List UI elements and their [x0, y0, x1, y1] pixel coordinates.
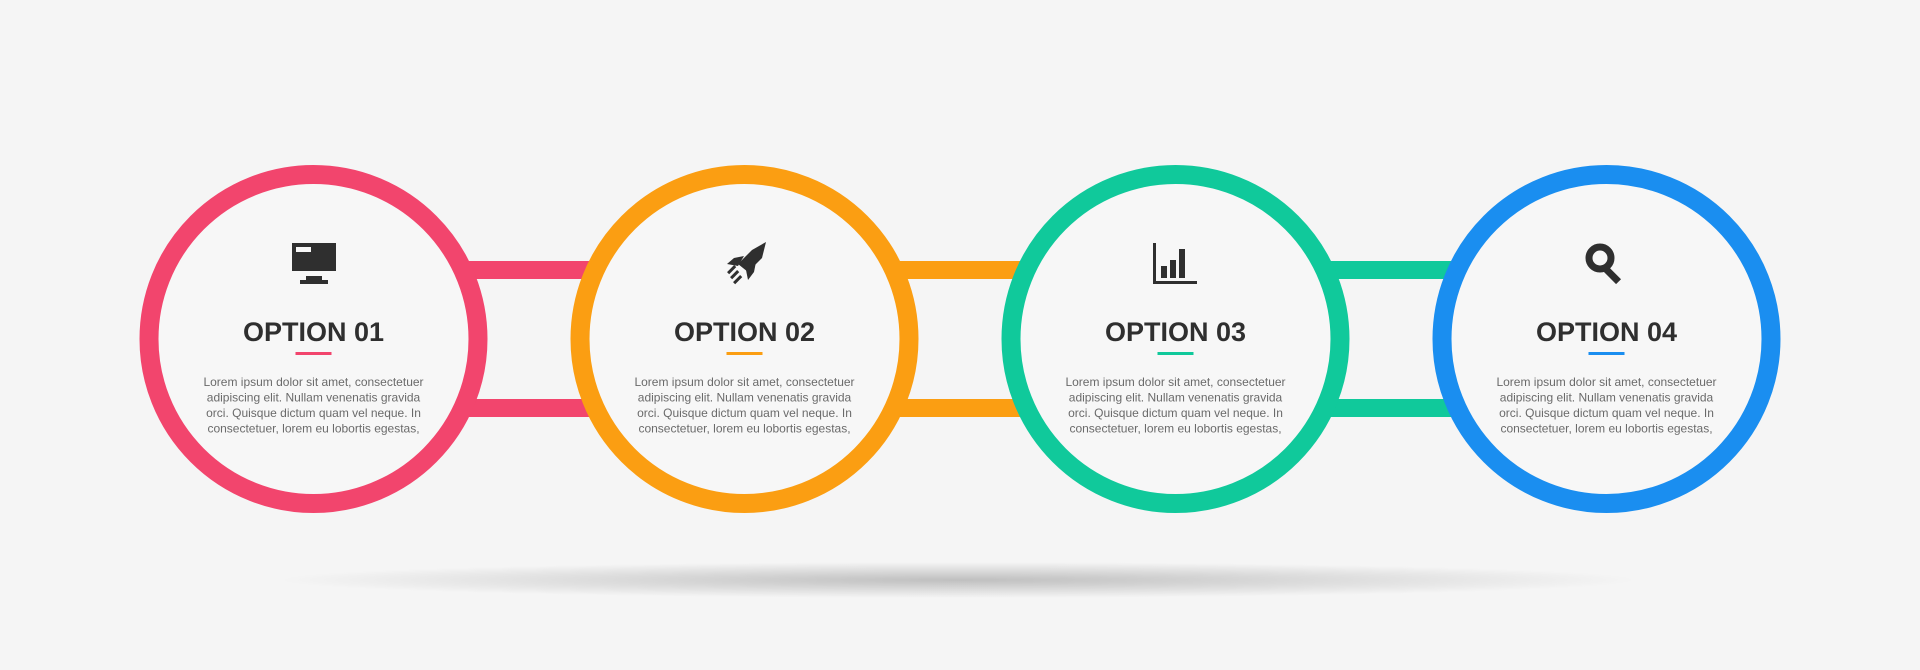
icon: bar chart	[1153, 243, 1197, 284]
text block: orci. Quisque dictum quam vel neque. In	[1068, 406, 1283, 420]
panel: option 01	[149, 174, 478, 504]
heading: OPTION 04	[1536, 317, 1677, 347]
connector 3	[1300, 261, 1480, 417]
text block: Lorem ipsum dolor sit amet, consectetuer	[634, 375, 855, 389]
text block: Lorem ipsum dolor sit amet, consectetuer	[1496, 375, 1717, 389]
heading: OPTION 02	[674, 317, 815, 347]
text block: adipiscing elit. Nullam venenatis gravida	[1069, 390, 1283, 404]
connector 2	[870, 261, 1050, 417]
panel: option 03	[1011, 174, 1340, 504]
heading: OPTION 03	[1105, 317, 1246, 347]
icon: rocket	[727, 242, 766, 284]
text block: consectetuer, lorem eu lobortis egestas,	[638, 422, 851, 436]
text block: adipiscing elit. Nullam venenatis gravida	[207, 390, 421, 404]
text block: consectetuer, lorem eu lobortis egestas,	[207, 422, 420, 436]
text block: adipiscing elit. Nullam venenatis gravida	[638, 390, 852, 404]
text block: adipiscing elit. Nullam venenatis gravida	[1500, 390, 1714, 404]
heading: OPTION 01	[243, 317, 384, 347]
text block: Lorem ipsum dolor sit amet, consectetuer	[1065, 375, 1286, 389]
text block: consectetuer, lorem eu lobortis egestas,	[1500, 422, 1713, 436]
text block: consectetuer, lorem eu lobortis egestas,	[1069, 422, 1282, 436]
icon: magnifier	[1589, 247, 1621, 284]
panel: option 02	[580, 174, 909, 504]
panel: option 04	[1442, 174, 1771, 504]
text block: orci. Quisque dictum quam vel neque. In	[1499, 406, 1714, 420]
icon: monitor	[292, 243, 336, 284]
text block: orci. Quisque dictum quam vel neque. In	[206, 406, 421, 420]
shadow	[278, 562, 1638, 598]
text block: orci. Quisque dictum quam vel neque. In	[637, 406, 852, 420]
text block: Lorem ipsum dolor sit amet, consectetuer	[203, 375, 424, 389]
connector 1	[440, 261, 620, 417]
